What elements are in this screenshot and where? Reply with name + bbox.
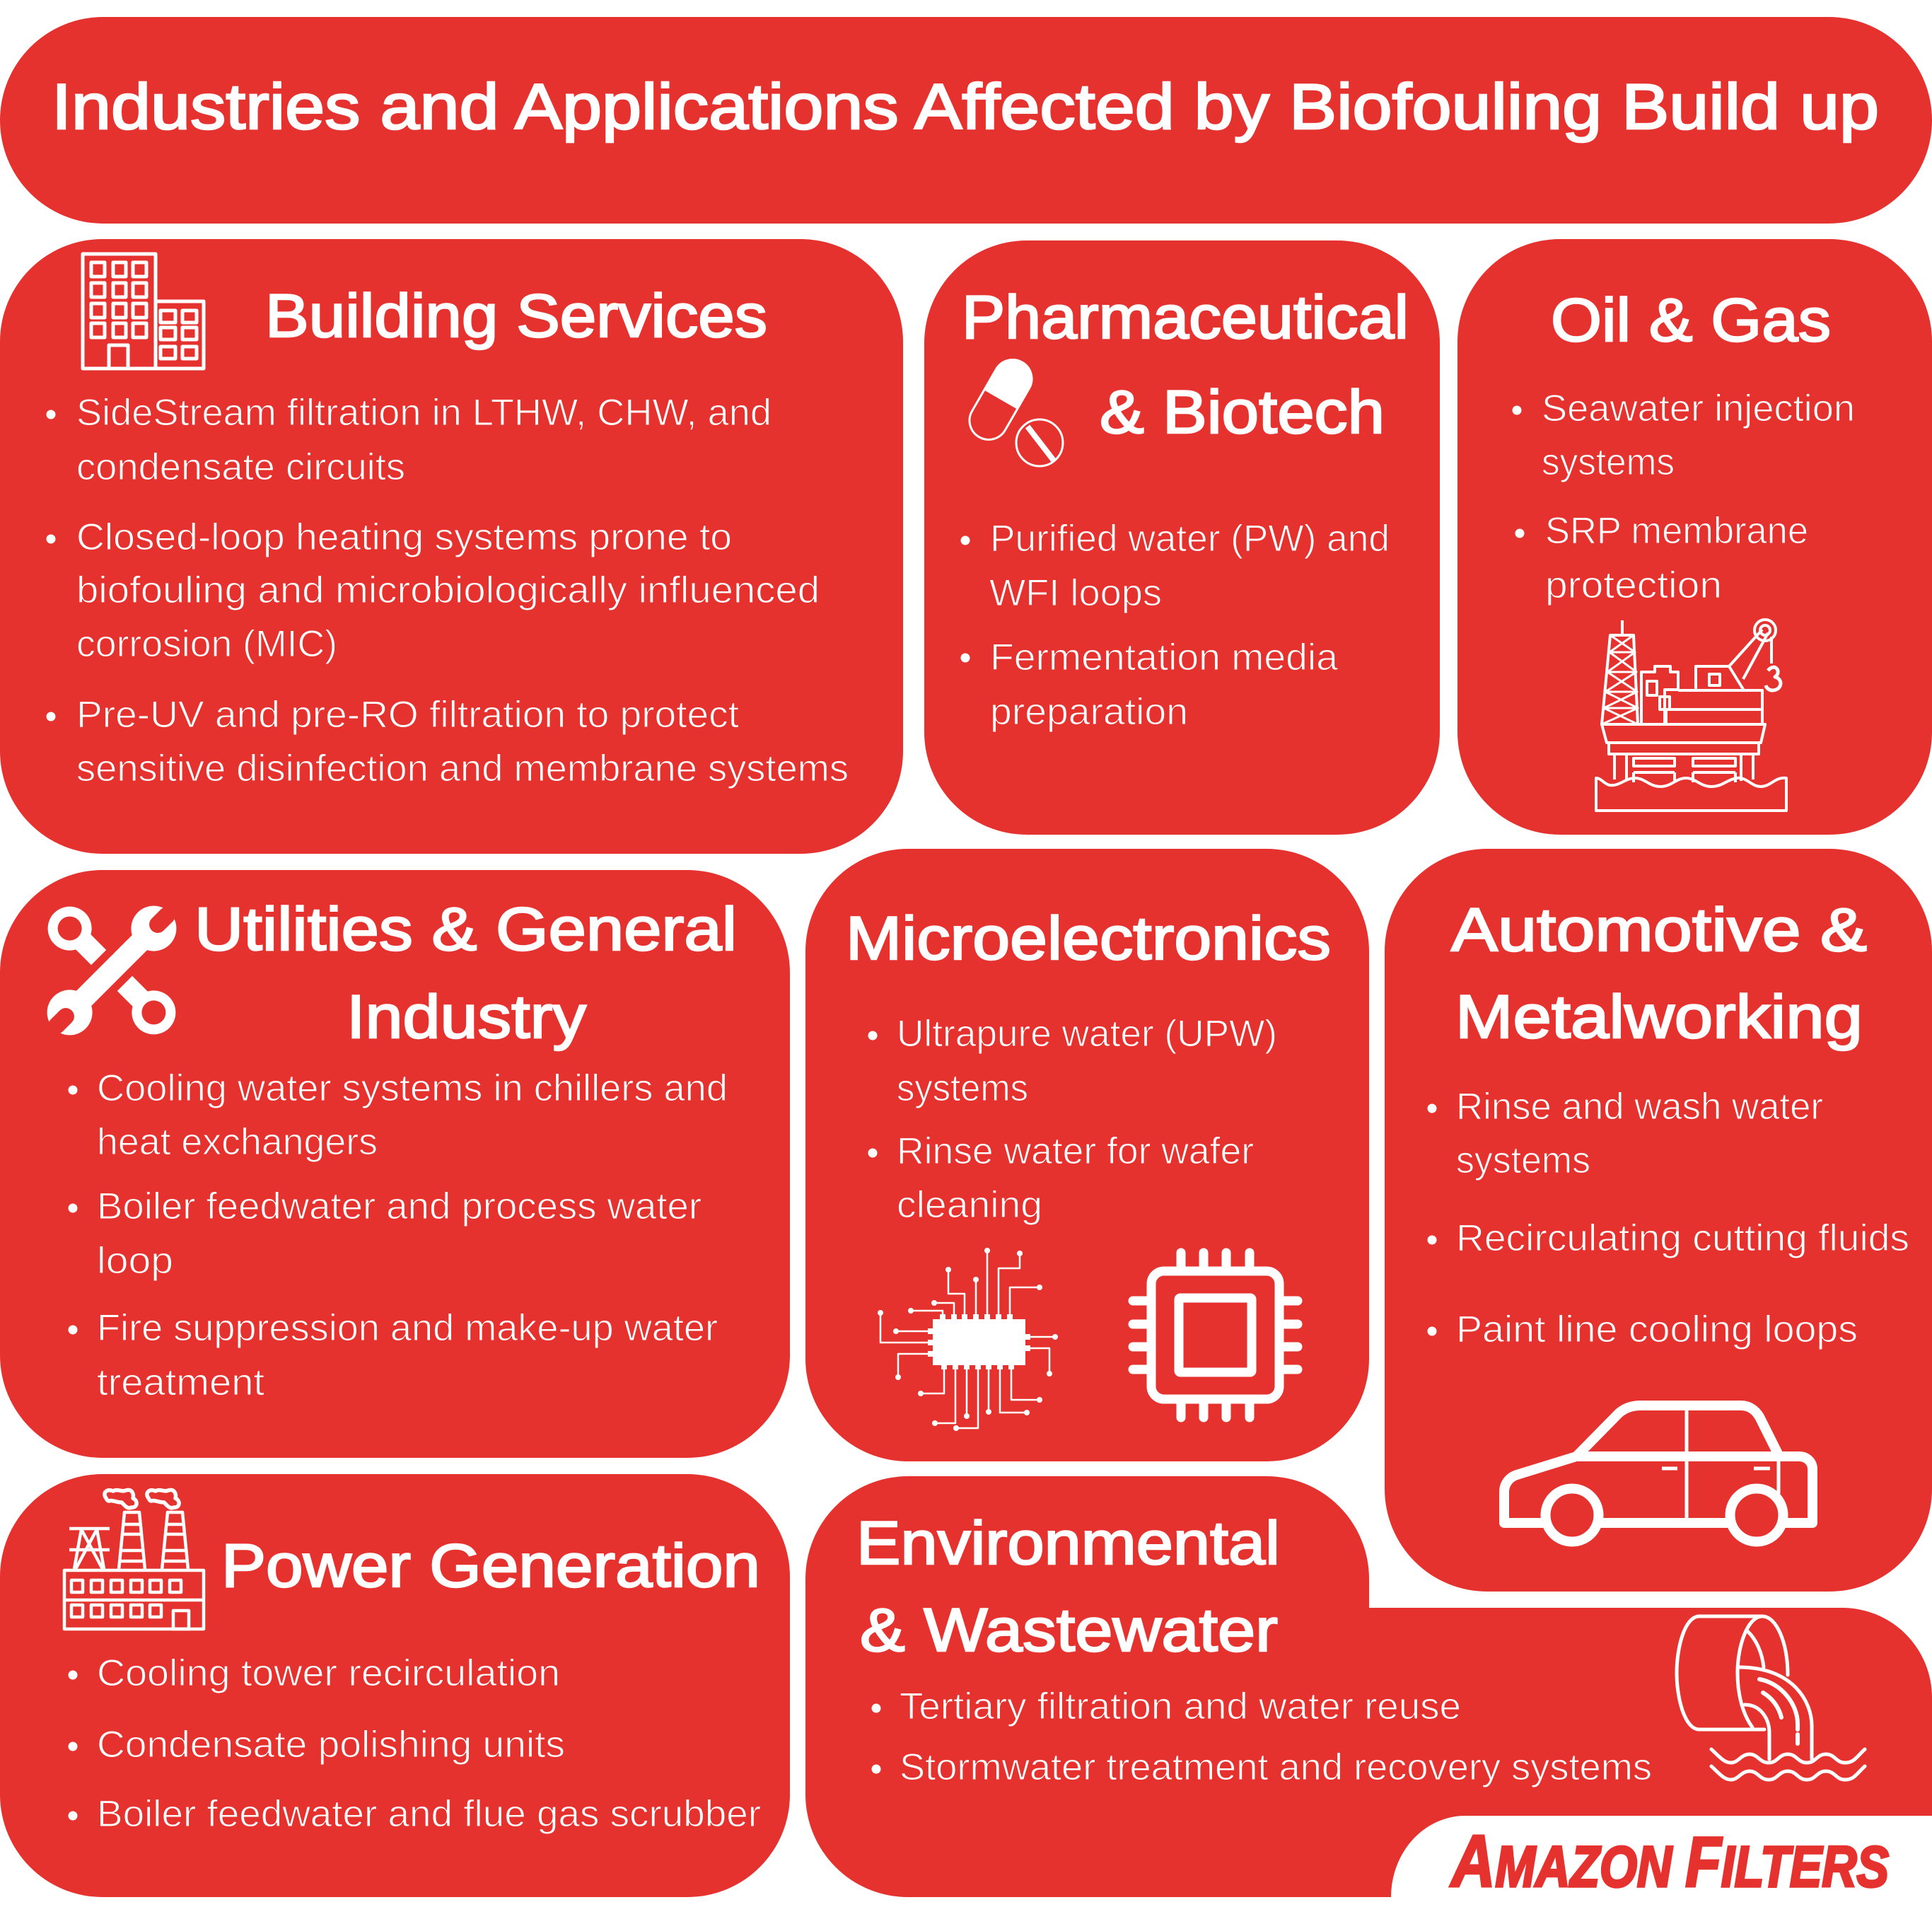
bullet list: Boiler feedwater and process water <box>97 1186 702 1227</box>
heading: Power Generation <box>221 1532 760 1600</box>
bullet list <box>960 518 1390 733</box>
bullet list <box>871 1686 1652 1788</box>
bullet list: condensate circuits <box>76 446 405 488</box>
bullet list <box>1512 388 1855 606</box>
logo: Amazon Filters: AMAZON FILTERS <box>1450 1821 1889 1903</box>
title banner <box>0 17 1932 224</box>
bullet list: Purified water (PW) and <box>990 518 1390 560</box>
bullet list: loop <box>97 1240 173 1282</box>
bullet list: Fermentation media <box>990 637 1339 678</box>
heading: Utilities & General <box>194 895 737 963</box>
icon: offshore oil rig <box>1596 620 1786 811</box>
bullet list: systems <box>1542 441 1675 483</box>
bullet list <box>68 1652 761 1835</box>
icon: power plant <box>64 1490 204 1629</box>
bullet list <box>868 1013 1277 1226</box>
bullet list: Ultrapure water (UPW) <box>897 1013 1277 1055</box>
bullet list: sensitive disinfection and membrane systems <box>76 748 849 789</box>
heading: Automotive & <box>1451 896 1867 964</box>
heading: Microelectronics <box>846 905 1331 973</box>
bullet list: systems <box>1456 1140 1590 1181</box>
bullet list: protection <box>1545 564 1722 606</box>
bullet list: treatment <box>97 1362 264 1403</box>
bullet list: systems <box>897 1067 1028 1109</box>
bullet list <box>68 1067 728 1403</box>
heading: Pharmaceutical <box>962 284 1409 352</box>
bullet list: Pre-UV and pre-RO filtration to protect <box>76 694 739 736</box>
bullet list: heat exchangers <box>97 1121 378 1163</box>
icon: capsule and tablet <box>962 353 1063 466</box>
bullet list <box>1427 1086 1909 1350</box>
heading: Oil & Gas <box>1551 286 1831 354</box>
panel: microelectronics <box>805 849 1369 1461</box>
icon: discharge pipe <box>1677 1616 1865 1780</box>
heading second line: & Biotech <box>1100 378 1385 446</box>
bullet list: Cooling tower recirculation <box>97 1652 560 1694</box>
bullet list: Stormwater treatment and recovery systems <box>900 1746 1652 1788</box>
bullet list: biofouling and microbiologically influenced <box>76 569 820 611</box>
panel: pharmaceutical and biotech <box>924 240 1440 835</box>
bullet list: Rinse and wash water <box>1456 1086 1823 1128</box>
bullet list: corrosion (MIC) <box>76 623 337 665</box>
bullet list: WFI loops <box>989 572 1162 614</box>
bullet list: Paint line cooling loops <box>1456 1309 1858 1350</box>
heading second line: Industry <box>347 983 586 1051</box>
bullet list <box>47 392 849 789</box>
bullet list: Tertiary filtration and water reuse <box>900 1686 1461 1727</box>
icon: crossed wrenches <box>35 893 189 1048</box>
bullet list: Recirculating cutting fluids <box>1456 1217 1909 1259</box>
bullet list: Closed-loop heating systems prone to <box>76 516 732 558</box>
title: Industries and Applications Affected by Biofouling Build up <box>52 71 1879 143</box>
heading: Environmental <box>856 1509 1280 1577</box>
icon: cpu chip <box>1133 1253 1298 1418</box>
bullet list: Fire suppression and make-up water <box>97 1307 718 1349</box>
panel: environmental and wastewater <box>805 1476 1932 1897</box>
panel: building services <box>0 239 903 854</box>
bullet list: preparation <box>990 691 1188 733</box>
panel: utilities and general industry <box>0 870 790 1458</box>
heading second line: Metalworking <box>1455 983 1863 1051</box>
icon: circuit chip <box>878 1248 1058 1431</box>
panel: oil and gas <box>1457 239 1932 835</box>
heading second line: & Wastewater <box>860 1596 1278 1664</box>
bullet list: SRP membrane <box>1545 510 1808 552</box>
icon: car <box>1504 1405 1812 1542</box>
bullet list: Rinse water for wafer <box>897 1130 1254 1172</box>
icon: building <box>83 254 204 369</box>
bullet list: cleaning <box>897 1184 1042 1226</box>
bullet list: Boiler feedwater and flue gas scrubber <box>97 1793 761 1835</box>
bullet list: Cooling water systems in chillers and <box>97 1067 728 1109</box>
panel: power generation <box>0 1474 790 1897</box>
bullet list: Seawater injection <box>1542 388 1855 429</box>
bullet list: Condensate polishing units <box>97 1724 565 1766</box>
bullet list: SideStream filtration in LTHW, CHW, and <box>76 392 772 434</box>
panel: automotive and metalworking <box>1385 849 1932 1592</box>
heading: Building Services <box>265 282 767 350</box>
